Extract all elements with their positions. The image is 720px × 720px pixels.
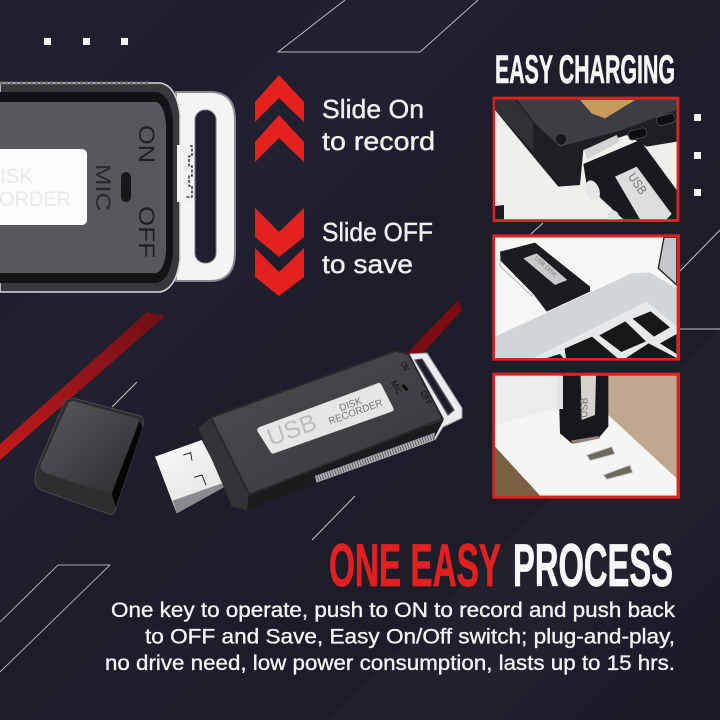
silver label (257, 383, 394, 454)
label MIC: MIC (91, 164, 114, 211)
plate text 2: ORDER (0, 188, 71, 211)
text: slide off (322, 217, 433, 279)
switch slider (177, 145, 192, 202)
description text: to OFF and Save, Easy On/Off switch; plug-and-play, (145, 626, 675, 648)
label ON: ON (398, 360, 411, 373)
device close-up: switch view (0, 83, 235, 292)
device inner rim (0, 92, 173, 283)
mic hole (401, 384, 409, 392)
photo frame 1: device port: USB (625, 171, 649, 197)
description text (105, 599, 676, 675)
photo frame 2: laptop port (492, 234, 680, 361)
USB recorder drive with cap (35, 351, 462, 515)
label USB: USB (263, 409, 320, 452)
description text: no drive need, low power consumption, lasts up to 15 hrs. (105, 652, 675, 675)
decorative outline: bottom left (0, 565, 110, 672)
metal connector (155, 440, 226, 513)
metal ring (408, 353, 462, 440)
device face panel (0, 102, 166, 273)
decorative line: between photos (531, 223, 543, 234)
drive body (198, 351, 444, 510)
text: slide on (322, 94, 435, 156)
label RECORDER: RECORDER (327, 398, 384, 427)
chevrons down (255, 208, 304, 296)
chevrons up (255, 75, 304, 162)
label OFF: OFF (418, 389, 434, 407)
heading: one easy process: ONE EASY (329, 532, 501, 599)
label plate (0, 149, 87, 225)
cap (35, 398, 143, 515)
red diagonal stripe: left (0, 312, 165, 460)
red diagonal stripe: right (407, 300, 462, 353)
mic hole (121, 172, 131, 202)
text: slide off: to save (322, 249, 413, 279)
photo frame 1: device port (493, 97, 679, 222)
decorative line: under drive (312, 496, 355, 540)
decorative outline: right side (680, 230, 720, 271)
device outer shell (0, 83, 180, 292)
decorative line: right horizontal (680, 328, 720, 330)
label MIC: MIC (389, 379, 404, 396)
label ON: ON (134, 125, 159, 163)
text: slide off: Slide OFF (322, 217, 433, 247)
right side dots (694, 114, 701, 196)
top left dots (44, 38, 128, 45)
label DISK: DISK (338, 396, 364, 414)
knurled side strip (315, 433, 435, 483)
photo frame 2: laptop port: USB DISK (533, 256, 557, 278)
decorative outline: top right (278, 0, 478, 52)
label OFF: OFF (134, 206, 159, 258)
photo frame 3: charger port: USB (579, 397, 590, 418)
ring slot (195, 110, 216, 263)
serrated edge (0, 82, 150, 84)
metal ring (176, 92, 235, 281)
text: slide on: to record (322, 126, 435, 156)
text: slide on: Slide On (322, 94, 424, 124)
plate text: ISK (0, 165, 33, 188)
photo frame 3: charger port (492, 373, 680, 499)
decorative line: near cap (112, 382, 137, 407)
description text: One key to operate, push to ON to record and push back (111, 599, 676, 622)
